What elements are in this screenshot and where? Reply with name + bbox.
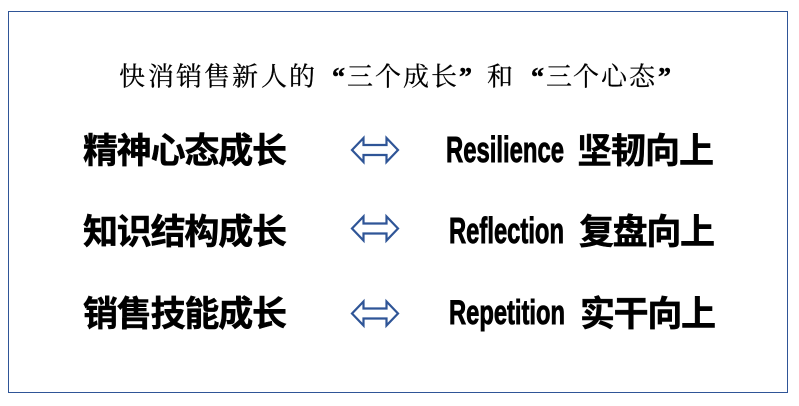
icon: double arrow — [352, 138, 398, 162]
label: Resilience: Resilience — [446, 129, 564, 170]
title: ” — [658, 62, 671, 92]
heading: spiritual mindset growth: 精神心态成长 — [83, 132, 287, 171]
title: “ — [332, 62, 345, 92]
icon: double arrow — [352, 302, 398, 326]
row 3: growth and mindset — [83, 294, 716, 334]
icon: double arrow — [352, 216, 398, 240]
title: 快消销售新人的 — [119, 62, 315, 92]
label: Reflection: Reflection — [449, 210, 564, 251]
title: 和 — [487, 62, 513, 92]
label: reflection Chinese: 复盘向上 — [579, 213, 715, 252]
row 1: growth and mindset — [83, 129, 714, 171]
title: ” — [459, 62, 472, 92]
label: resilience Chinese: 坚韧向上 — [577, 132, 714, 171]
heading: sales skill growth: 销售技能成长 — [83, 295, 287, 334]
heading: knowledge structure growth: 知识结构成长 — [83, 213, 287, 252]
row 2: growth and mindset — [83, 210, 715, 252]
title: 三个心态 — [546, 62, 656, 92]
label: repetition Chinese: 实干向上 — [580, 295, 716, 334]
label: Repetition: Repetition — [449, 294, 565, 332]
title: “ — [531, 62, 544, 92]
title — [119, 62, 671, 92]
title: 三个成长 — [347, 62, 457, 92]
